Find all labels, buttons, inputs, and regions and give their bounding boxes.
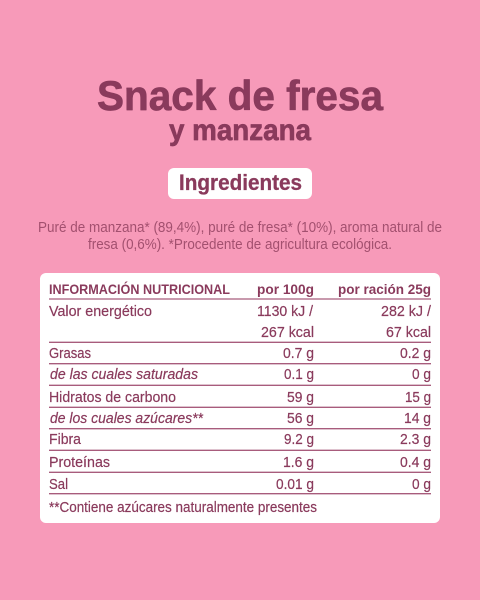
- row: sal: [49, 476, 431, 493]
- row: grasas: [49, 345, 431, 362]
- row: valor energético: 1130 kJ /: [257, 303, 314, 320]
- row: azúcares: [50, 410, 431, 427]
- row: proteínas: [49, 454, 431, 471]
- row: saturadas: 0.1 g: [284, 366, 314, 383]
- row: fibra: [49, 431, 431, 448]
- row: azúcares: 14 g: [404, 410, 431, 427]
- table header: por 100g: [257, 281, 314, 297]
- table header: [49, 280, 431, 297]
- footnote: **Contiene azúcares naturalmente presentes: [49, 499, 317, 516]
- title: y manzana: [169, 114, 311, 147]
- row: valor energético: [49, 303, 432, 341]
- row: saturadas: de las cuales saturadas: [50, 366, 198, 383]
- row: fibra: Fibra: [49, 431, 82, 448]
- panel: nutrition table: [40, 273, 440, 523]
- row: grasas: 0.2 g: [400, 345, 431, 362]
- row: hidratos de carbono: 59 g: [287, 389, 314, 406]
- row: hidratos de carbono: 15 g: [405, 389, 431, 406]
- ingredients text: fresa (0,6%). *Procedente de agricultura ecológica.: [88, 237, 392, 253]
- row: grasas: Grasas: [49, 345, 91, 362]
- ingredients heading pill: Ingredientes: [179, 170, 302, 195]
- row: sal: 0 g: [412, 476, 431, 493]
- row: proteínas: 1.6 g: [283, 454, 314, 471]
- row: azúcares: de los cuales azúcares**: [50, 410, 204, 427]
- row: grasas: 0.7 g: [283, 345, 314, 362]
- row: valor energético: Valor energético: [49, 303, 152, 320]
- row: fibra: 9.2 g: [284, 431, 314, 448]
- ingredients text: Puré de manzana* (89,4%), puré de fresa* (10%), aroma natural de: [38, 220, 442, 236]
- row: sal: Sal: [49, 476, 68, 493]
- row: saturadas: 0 g: [412, 366, 431, 383]
- row: saturadas: [50, 366, 431, 383]
- title: Snack de fresa: [97, 72, 384, 119]
- row: valor energético: 282 kJ /: [381, 303, 432, 320]
- row: proteínas: 0.4 g: [400, 454, 431, 471]
- table header: por ración 25g: [338, 281, 431, 297]
- row: valor energético: 67 kcal: [386, 324, 431, 341]
- row: hidratos de carbono: Hidratos de carbono: [49, 389, 176, 406]
- table header: INFORMACIÓN NUTRICIONAL: [49, 280, 230, 297]
- row: valor energético: 267 kcal: [261, 324, 314, 341]
- row: proteínas: Proteínas: [49, 454, 110, 471]
- row: sal: 0.01 g: [276, 476, 314, 493]
- row: azúcares: 56 g: [287, 410, 314, 427]
- row: fibra: 2.3 g: [400, 431, 431, 448]
- ingredients text: [38, 220, 442, 253]
- row: hidratos de carbono: [49, 389, 431, 406]
- title: [97, 72, 384, 147]
